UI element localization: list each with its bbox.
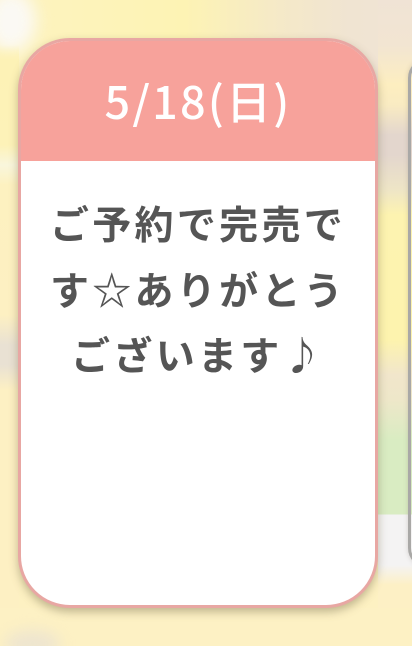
background: white flower blur xyxy=(0,0,36,52)
card header: date xyxy=(18,38,378,161)
next card grey edge xyxy=(408,58,412,568)
background: bottom band xyxy=(0,608,412,646)
card message text: す☆ありがとう xyxy=(50,260,346,316)
card header: date: 5/18(日) xyxy=(105,67,291,132)
panel: date card xyxy=(18,38,378,608)
background: right strip xyxy=(378,0,412,646)
background: left strip xyxy=(0,45,19,646)
card message text: ご予約で完売で xyxy=(50,195,346,251)
card message text: ございます♪ xyxy=(71,326,325,382)
card message text xyxy=(50,195,346,382)
background: bottom left blur xyxy=(5,630,60,646)
background: top band xyxy=(0,0,412,100)
